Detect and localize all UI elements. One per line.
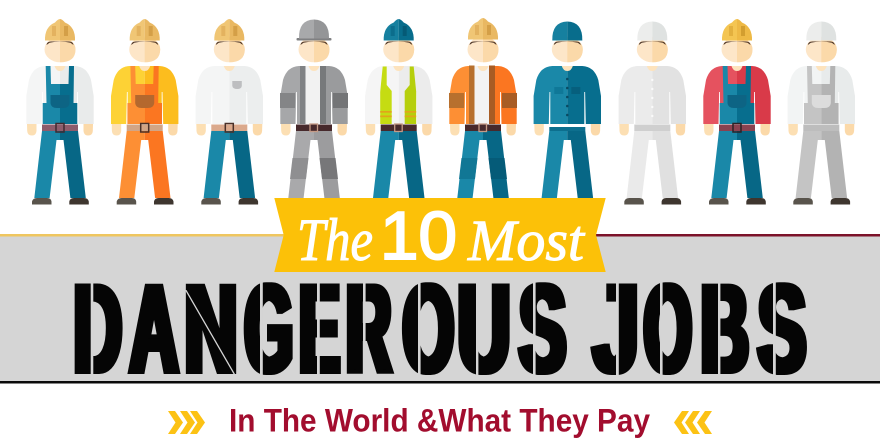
worker 9: red shirt, teal overalls xyxy=(703,19,771,204)
banner heading: The 10 Most: The xyxy=(297,207,373,273)
worker 6: orange jacket xyxy=(449,18,517,204)
main title: DANGEROUS JOBS: N xyxy=(185,260,237,399)
worker 2: orange overalls xyxy=(111,19,178,204)
workers row xyxy=(26,18,855,204)
left chevrons xyxy=(168,411,205,434)
worker 10: grey overalls xyxy=(788,22,855,204)
yellow ribbon banner xyxy=(274,198,606,274)
main title: DANGEROUS JOBS: D xyxy=(74,260,122,399)
worker 3: white shirt, teal trousers xyxy=(196,19,263,204)
main title: DANGEROUS JOBS: G xyxy=(245,260,293,399)
yellow rule left xyxy=(0,234,290,236)
maroon rule right xyxy=(590,234,880,236)
banner heading: The 10 Most: 10 xyxy=(380,198,457,274)
main title: DANGEROUS JOBS: A xyxy=(130,260,178,399)
worker 1: teal overalls xyxy=(26,19,94,204)
banner heading: The 10 Most xyxy=(297,198,586,274)
right chevrons xyxy=(674,411,712,434)
black rule bottom xyxy=(0,381,880,384)
subtitle: In The World &What They Pay xyxy=(229,402,650,438)
worker 7: teal coverall xyxy=(534,22,601,204)
main title: DANGEROUS JOBS: O xyxy=(644,260,692,399)
main title: DANGEROUS JOBS: U xyxy=(458,260,510,399)
worker 8: white suit xyxy=(619,22,686,204)
main title: DANGEROUS JOBS: E xyxy=(299,260,340,399)
main title: DANGEROUS JOBS: J xyxy=(593,260,639,399)
worker 4: grey work suit xyxy=(280,20,348,204)
worker 5: hi-vis vest xyxy=(365,19,432,204)
main title: DANGEROUS JOBS: R xyxy=(346,260,391,399)
main title: DANGEROUS JOBS: O xyxy=(403,260,454,399)
gray title band xyxy=(0,236,880,381)
main title: DANGEROUS JOBS: S xyxy=(519,260,566,399)
banner heading: The 10 Most: Most xyxy=(467,208,586,273)
main title: DANGEROUS JOBS xyxy=(74,260,806,399)
main title: DANGEROUS JOBS: B xyxy=(701,260,749,399)
main title: DANGEROUS JOBS: S xyxy=(758,260,806,399)
